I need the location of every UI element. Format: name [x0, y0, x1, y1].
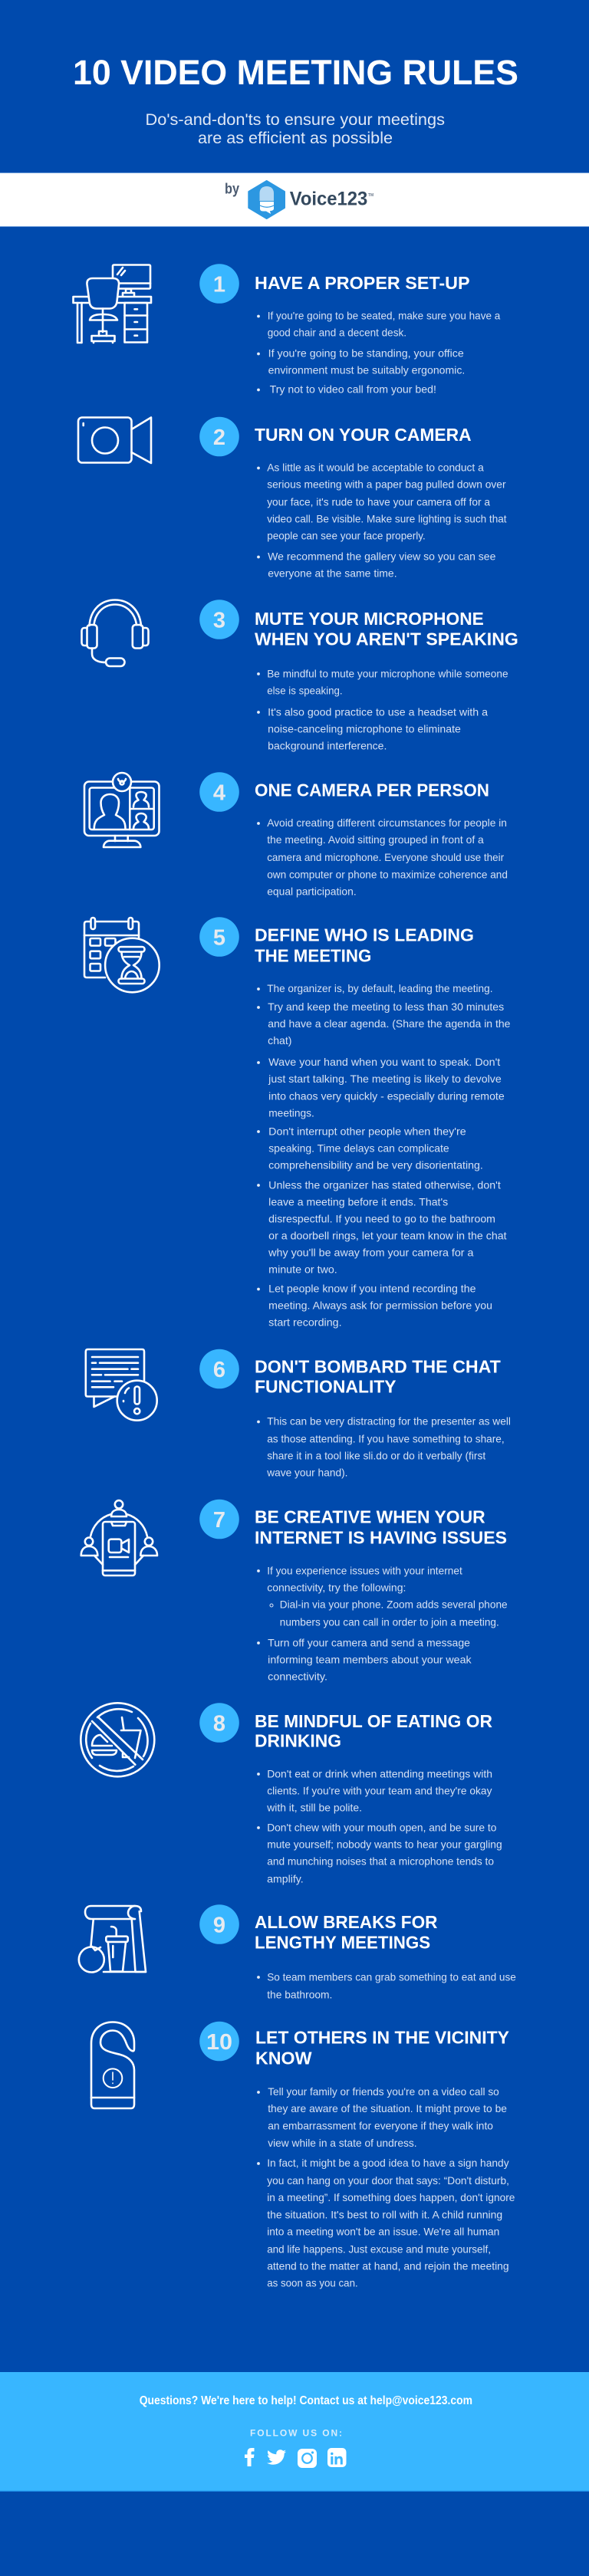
- bullet list: Dial-in via your phone. Zoom adds several phone: [280, 1598, 508, 1611]
- bullet list: people can see your face properly.: [267, 530, 426, 542]
- icon: Facebook: [245, 2448, 255, 2466]
- icon: desk, chair and monitor: [74, 265, 151, 343]
- number badge: 7: [213, 1508, 225, 1533]
- bullet list: numbers you can call in order to join a meeting.: [280, 1616, 499, 1628]
- bullet list: video call. Be visible. Make sure lighting is such that: [267, 513, 507, 525]
- heading: [255, 1356, 501, 1397]
- bullet list: meeting. Always ask for permission before you: [268, 1300, 492, 1312]
- heading: [255, 609, 518, 649]
- bullet list: why you'll be away from your camera for a: [268, 1247, 474, 1259]
- panel: rule 6: [86, 1349, 511, 1479]
- bullet list: The organizer is, by default, leading the meeting.: [267, 982, 492, 994]
- trademark: TM: [368, 193, 373, 198]
- panel: rule 1: [74, 264, 501, 396]
- bullet list: else is speaking.: [267, 684, 343, 696]
- bullet list: If you're going to be standing, your office: [268, 347, 464, 360]
- heading: LENGTHY MEETINGS: [255, 1933, 430, 1953]
- bullet list: connectivity.: [268, 1671, 327, 1683]
- heading: THE MEETING: [255, 945, 371, 965]
- bullet list: camera and microphone. Everyone should use their: [267, 851, 505, 863]
- bullet list: equal participation.: [267, 885, 357, 897]
- heading: ONE CAMERA PER PERSON: [255, 780, 489, 800]
- bullet list: Don't interrupt other people when they're: [268, 1125, 466, 1137]
- footer panel: [0, 2372, 589, 2492]
- bullet list: and life happens. Just excuse and mute yourself,: [267, 2242, 491, 2255]
- bullet list: [257, 462, 507, 580]
- number badge: 6: [213, 1358, 225, 1382]
- bullet list: you can hang on your door that says: “Don't disturb,: [267, 2174, 509, 2187]
- panel: rule 4: [84, 772, 508, 897]
- bullet list: [257, 1970, 516, 2000]
- bullet list: environment must be suitably ergonomic.: [268, 364, 465, 376]
- bullet list: In fact, it might be a good idea to have a sign handy: [267, 2157, 509, 2169]
- number badge: [199, 772, 239, 812]
- icon: Voice123 hexagon microphone logo: [248, 181, 285, 219]
- heading: [255, 2028, 509, 2068]
- icon: door hanger sign: [91, 2022, 134, 2108]
- bullet list: disrespectful. If you need to go to the bathroom: [268, 1212, 495, 1224]
- bullet list: Wave your hand when you want to speak. Don't: [268, 1056, 500, 1068]
- number badge: [199, 1904, 239, 1944]
- bullet list: the situation. It's best to roll with it. A child running: [267, 2208, 502, 2220]
- heading: [255, 925, 474, 965]
- icon: no food or drink: [81, 1703, 154, 1776]
- heading: DON'T BOMBARD THE CHAT: [255, 1356, 501, 1376]
- bullet list: the bathroom.: [267, 1988, 332, 2000]
- bullet list: amplify.: [267, 1873, 304, 1885]
- bullet list: Be mindful to mute your microphone while someone: [267, 667, 508, 679]
- bullet list: chat): [268, 1034, 291, 1046]
- bullet list: and munching noises that a microphone tends to: [267, 1855, 494, 1868]
- bullet list: [257, 310, 501, 396]
- bullet list: your face, it's rude to have your camera off for a: [267, 495, 490, 508]
- heading: HAVE A PROPER SET-UP: [255, 273, 470, 293]
- heading: BE MINDFUL OF EATING OR: [255, 1711, 492, 1731]
- bullet list: Don't eat or drink when attending meetings with: [267, 1767, 492, 1779]
- logo band: [0, 172, 589, 227]
- icon: LinkedIn: [327, 2448, 347, 2467]
- bullet list: as soon as you can.: [267, 2277, 358, 2289]
- bullet list: the meeting. Avoid sitting grouped in front of a: [267, 833, 484, 846]
- bullet list: [257, 816, 508, 897]
- bullet list: Avoid creating different circumstances for people in: [267, 816, 507, 829]
- number badge: [199, 600, 239, 639]
- bullet list: informing team members about your weak: [268, 1654, 472, 1666]
- bullet list: This can be very distracting for the presenter as well: [267, 1415, 511, 1428]
- heading: FUNCTIONALITY: [255, 1377, 397, 1397]
- follow label: FOLLOW US ON:: [250, 2427, 342, 2438]
- bullet list: leave a meeting before it ends. That's: [268, 1195, 448, 1208]
- number badge: [199, 2022, 239, 2061]
- subtitle: [146, 111, 445, 147]
- number badge: [199, 1703, 239, 1743]
- bullet list: Unless the organizer has stated otherwise, don't: [268, 1178, 501, 1191]
- bullet list: in a meeting”. If something does happen, don't ignore: [267, 2191, 515, 2203]
- bullet list: mute yourself; nobody wants to hear your gargling: [267, 1838, 502, 1851]
- bullet list: As little as it would be acceptable to conduct a: [267, 462, 484, 474]
- heading: ALLOW BREAKS FOR: [255, 1912, 438, 1932]
- panel: rule 2: [78, 417, 507, 580]
- bullet list: We recommend the gallery view so you can see: [268, 550, 496, 563]
- bullet list: or a doorbell rings, let your team know in the chat: [268, 1230, 507, 1242]
- heading: MUTE YOUR MICROPHONE: [255, 609, 484, 629]
- by label: by: [225, 182, 239, 198]
- heading: WHEN YOU AREN'T SPEAKING: [255, 629, 518, 649]
- bullet list: [257, 1564, 508, 1683]
- bullet list: connectivity, try the following:: [267, 1581, 406, 1593]
- icon: phone with connected people: [81, 1500, 157, 1576]
- panel: rule 9: [79, 1904, 516, 2000]
- contact line: Questions? We're here to help! Contact us at help@voice123.com: [140, 2394, 472, 2407]
- number badge: 9: [213, 1914, 225, 1938]
- panel: rule 7: [81, 1500, 508, 1683]
- bullet list: [257, 1415, 511, 1479]
- bullet list: as those attending. If you have something to share,: [267, 1433, 505, 1445]
- bullet list: Turn off your camera and send a message: [268, 1636, 470, 1648]
- bullet list: into chaos very quickly - especially during remote: [268, 1089, 505, 1102]
- number badge: [199, 417, 239, 456]
- number badge: 4: [213, 780, 225, 805]
- bullet list: wave your hand).: [266, 1467, 348, 1479]
- bullet list: comprehensibility and be very disorientating.: [268, 1158, 483, 1171]
- bullet list: an embarrassment for everyone if they walk into: [268, 2119, 493, 2131]
- heading: KNOW: [255, 2049, 312, 2068]
- bullet list: with it, still be polite.: [266, 1801, 362, 1813]
- heading: [255, 1912, 438, 1953]
- bullet list: clients. If you're with your team and they're okay: [267, 1784, 492, 1796]
- number badge: [199, 1500, 239, 1539]
- number badge: 3: [213, 609, 225, 633]
- bullet list: noise-canceling microphone to eliminate: [268, 722, 461, 734]
- bullet list: serious meeting with a paper bag pulled down over: [267, 478, 506, 491]
- bullet list: [257, 667, 508, 751]
- icon: chat message with warning: [86, 1349, 157, 1421]
- bullet list: background interference.: [268, 739, 387, 751]
- bullet list: good chair and a decent desk.: [268, 327, 406, 339]
- icon: Instagram: [298, 2449, 317, 2468]
- heading: INTERNET IS HAVING ISSUES: [255, 1527, 507, 1547]
- bullet list: they are aware of the situation. It might prove to be: [268, 2102, 507, 2114]
- title: 10 VIDEO MEETING RULES: [73, 53, 518, 92]
- bullet list: [257, 2085, 515, 2289]
- bullet list: Don't chew with your mouth open, and be sure to: [267, 1821, 497, 1833]
- number badge: 1: [213, 273, 225, 297]
- icon: video camera: [78, 417, 151, 463]
- bullet list: [257, 982, 511, 1329]
- bullet list: share it in a tool like sli.do or do it verbally (first: [267, 1450, 485, 1462]
- heading: DEFINE WHO IS LEADING: [255, 925, 474, 945]
- number badge: [199, 264, 239, 304]
- bullet list: start recording.: [268, 1316, 342, 1329]
- bullet list: just start talking. The meeting is likely to devolve: [268, 1073, 502, 1085]
- heading: [255, 1507, 507, 1547]
- bullet list: speaking. Time delays can complicate: [268, 1142, 449, 1154]
- bullet list: [257, 1767, 502, 1885]
- heading: DRINKING: [255, 1731, 341, 1751]
- bullet list: So team members can grab something to eat and use: [267, 1970, 516, 1983]
- number badge: 2: [213, 426, 225, 450]
- subtitle: Do's-and-don'ts to ensure your meetings: [146, 111, 445, 129]
- bullet list: If you experience issues with your internet: [267, 1564, 462, 1576]
- panel: rule 8: [81, 1703, 502, 1885]
- panel: rule 10: [91, 2022, 515, 2289]
- header: title and subtitle: [73, 53, 518, 147]
- bullet list: If you're going to be seated, make sure you have a: [268, 310, 501, 322]
- number badge: 10: [206, 2030, 232, 2055]
- Voice123 wordmark: Voice123: [290, 189, 367, 210]
- bullet list: It's also good practice to use a headset with a: [268, 705, 488, 718]
- icon: lunch bag with drink and apple: [79, 1906, 146, 1972]
- bullet list: Let people know if you intend recording the: [268, 1283, 476, 1295]
- bullet list: view while in a state of undress.: [268, 2137, 417, 2149]
- number badge: [199, 917, 239, 957]
- heading: LET OTHERS IN THE VICINITY: [255, 2028, 509, 2048]
- icon: Twitter: [267, 2450, 286, 2465]
- number badge: 8: [213, 1711, 225, 1736]
- bullet list: attend to the matter at hand, and rejoin the meeting: [267, 2259, 509, 2272]
- heading: TURN ON YOUR CAMERA: [255, 425, 472, 445]
- bullet list: minute or two.: [268, 1263, 337, 1276]
- icon: video call monitor: [84, 773, 160, 847]
- bullet list: Try and keep the meeting to less than 30 minutes: [268, 1001, 504, 1013]
- bullet list: and have a clear agenda. (Share the agenda in the: [268, 1017, 511, 1030]
- bullet list: Try not to video call from your bed!: [270, 383, 436, 396]
- heading: BE CREATIVE WHEN YOUR: [255, 1507, 485, 1527]
- panel: rule 5: [84, 917, 511, 1329]
- icon: calendar with hourglass: [84, 918, 160, 992]
- number badge: [199, 1349, 239, 1388]
- bullet list: meetings.: [268, 1106, 314, 1119]
- heading: [255, 1711, 492, 1751]
- icon: headset: [81, 600, 149, 666]
- bullet list: everyone at the same time.: [268, 567, 397, 580]
- subtitle: are as efficient as possible: [198, 130, 393, 147]
- bullet list: into a meeting won't be an issue. We're all human: [267, 2225, 499, 2237]
- bullet list: own computer or phone to maximize coherence and: [267, 868, 508, 880]
- number badge: 5: [213, 926, 225, 951]
- panel: rule 3: [81, 600, 518, 751]
- bullet list: Tell your family or friends you're on a video call so: [268, 2085, 499, 2098]
